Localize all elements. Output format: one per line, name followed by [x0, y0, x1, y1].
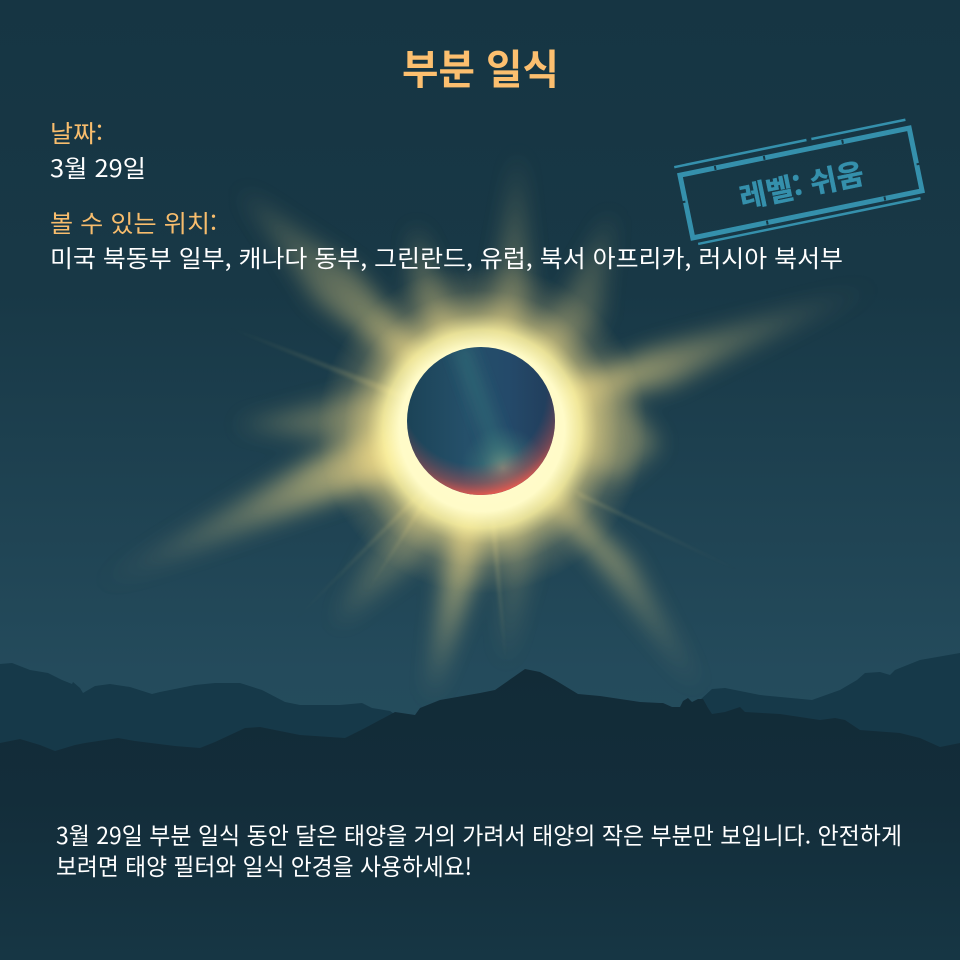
front mountain range [0, 669, 960, 960]
visibility label: 볼 수 있는 위치: [50, 204, 217, 239]
stamp: level easy [674, 119, 926, 246]
date value: 3월 29일 [50, 149, 146, 184]
date label: 날짜: [50, 114, 103, 149]
corona glow [317, 264, 647, 594]
description: 보려면 태양 필터와 일식 안경을 사용하세요! [56, 848, 472, 882]
description: 3월 29일 부분 일식 동안 달은 태양을 거의 가려서 태양의 작은 부분만 보입니다. 안전하게 [56, 817, 902, 851]
title: 부분 일식 [402, 36, 559, 96]
moon [407, 347, 555, 495]
stamp: level easy: 레벨: 쉬움 [735, 151, 867, 217]
back mountain range [0, 653, 960, 780]
visibility value: 미국 북동부 일부, 캐나다 동부, 그린란드, 유럽, 북서 아프리카, 러시아 북서부 [50, 239, 843, 274]
corona rays [93, 150, 885, 700]
description [56, 817, 902, 882]
